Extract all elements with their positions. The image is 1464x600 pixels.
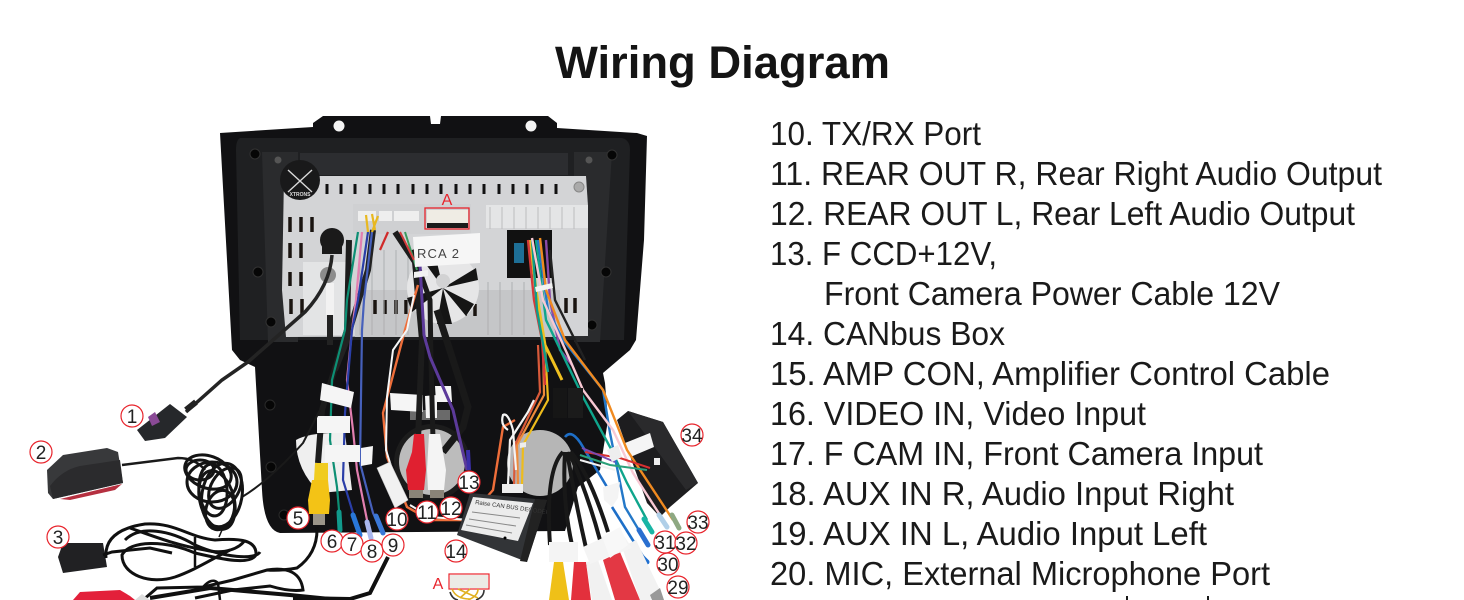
callout 2: 2: [36, 443, 46, 464]
harness tie and connectors: [535, 283, 622, 507]
red plug bottom left: [73, 590, 150, 600]
logo sticker: XTRONS: [290, 192, 311, 198]
legend item 12: 12. REAR OUT L, Rear Left Audio Output: [770, 195, 1355, 232]
callout 5: 5: [293, 509, 303, 530]
GPS cable coil: [180, 449, 248, 537]
callout 1: 1: [127, 407, 137, 428]
head unit bezel frame: [220, 116, 647, 533]
callout 10: 10: [386, 510, 408, 531]
GPS antenna: [47, 410, 320, 500]
number callouts: [30, 405, 709, 599]
box 34: [617, 411, 698, 517]
callout 34: 34: [681, 426, 703, 447]
callout 7: [341, 533, 363, 556]
callout 7: 7: [347, 535, 357, 556]
photo: head unit wiring: [30, 116, 709, 600]
lower body holes: [265, 400, 573, 520]
black fan-out leads: [549, 452, 608, 548]
RCA plugs at bottom: [549, 527, 664, 600]
CANbus box: Raise CAN BUS DECODER: [475, 500, 551, 517]
callout 8: 8: [367, 542, 377, 563]
wire labels: [317, 383, 452, 466]
callout 11: 11: [417, 503, 437, 524]
legend item 19: 19. AUX IN L, Audio Input Left: [770, 515, 1207, 552]
fakra connector 1: [137, 402, 196, 441]
wire tips: [339, 512, 383, 538]
callout 8: [361, 540, 383, 563]
right wire tips: [639, 515, 679, 562]
USB cable coils: [103, 524, 388, 600]
top mounting holes: [250, 120, 617, 330]
callout 9: 9: [388, 536, 398, 557]
callout A: A: [442, 192, 453, 209]
centre red and white RCA: [406, 434, 469, 498]
legend item 10: 10. TX/RX Port: [770, 115, 981, 152]
fuse window: [507, 230, 552, 278]
callout 33: 33: [687, 513, 709, 534]
legend item 13: 13. F CCD+12V,: [770, 235, 997, 272]
centre bundle and RCA lead: [383, 232, 515, 520]
silver chassis: [282, 176, 588, 337]
callout 31: 31: [654, 533, 676, 554]
legend item 18: 18. AUX IN R, Audio Input Right: [770, 475, 1234, 512]
callout 3: [47, 526, 69, 549]
callout 14: 14: [445, 542, 467, 563]
logo sticker: [280, 160, 320, 200]
legend item 16: 16. VIDEO IN, Video Input: [770, 395, 1146, 432]
callout 32: 32: [675, 534, 697, 555]
callout 6: [321, 530, 343, 553]
callout 29: 29: [667, 578, 689, 599]
callout 1: [121, 405, 143, 428]
legend item 20: 20. MIC, External Microphone Port: [770, 555, 1270, 592]
callout 3: 3: [53, 528, 63, 549]
left wire bundle: [318, 214, 388, 538]
callout A: [425, 192, 469, 229]
legend item 13 continued: Front Camera Power Cable 12V: [824, 275, 1280, 312]
RCA2 label: RCA 2: [417, 246, 459, 261]
legend item 14: 14. CANbus Box: [770, 315, 1005, 352]
callout 13: 13: [458, 473, 480, 494]
legend item 15: 15. AMP CON, Amplifier Control Cable: [770, 355, 1330, 392]
screw: [574, 182, 584, 192]
bottom connector A: [433, 574, 489, 600]
bottom connector A: A: [433, 576, 444, 593]
callout 5: [287, 507, 309, 530]
white connector 10: [377, 462, 408, 508]
callout 2: [30, 441, 52, 464]
title: Wiring Diagram: [555, 37, 890, 88]
callout 9: [382, 534, 404, 557]
right wire harness: [528, 238, 673, 558]
connector block: [353, 204, 471, 234]
callout 6: 6: [327, 532, 337, 553]
legend item 17: 17. F CAM IN, Front Camera Input: [770, 435, 1263, 472]
cooling fan: [407, 252, 479, 324]
CANbus box: [457, 493, 551, 562]
cable tie: [414, 270, 428, 278]
antenna plug and cable: [186, 228, 344, 412]
port legend list: [770, 115, 1382, 592]
RCA2 label: [413, 233, 480, 267]
yellow RCA 5: [308, 463, 330, 525]
chassis slots: [327, 184, 556, 194]
legend item 11: 11. REAR OUT R, Rear Right Audio Output: [770, 155, 1382, 192]
callout 30: 30: [657, 555, 679, 576]
USB plug: [58, 543, 107, 573]
callout 12: 12: [440, 499, 462, 520]
wiring into CANbus box: [502, 345, 548, 493]
